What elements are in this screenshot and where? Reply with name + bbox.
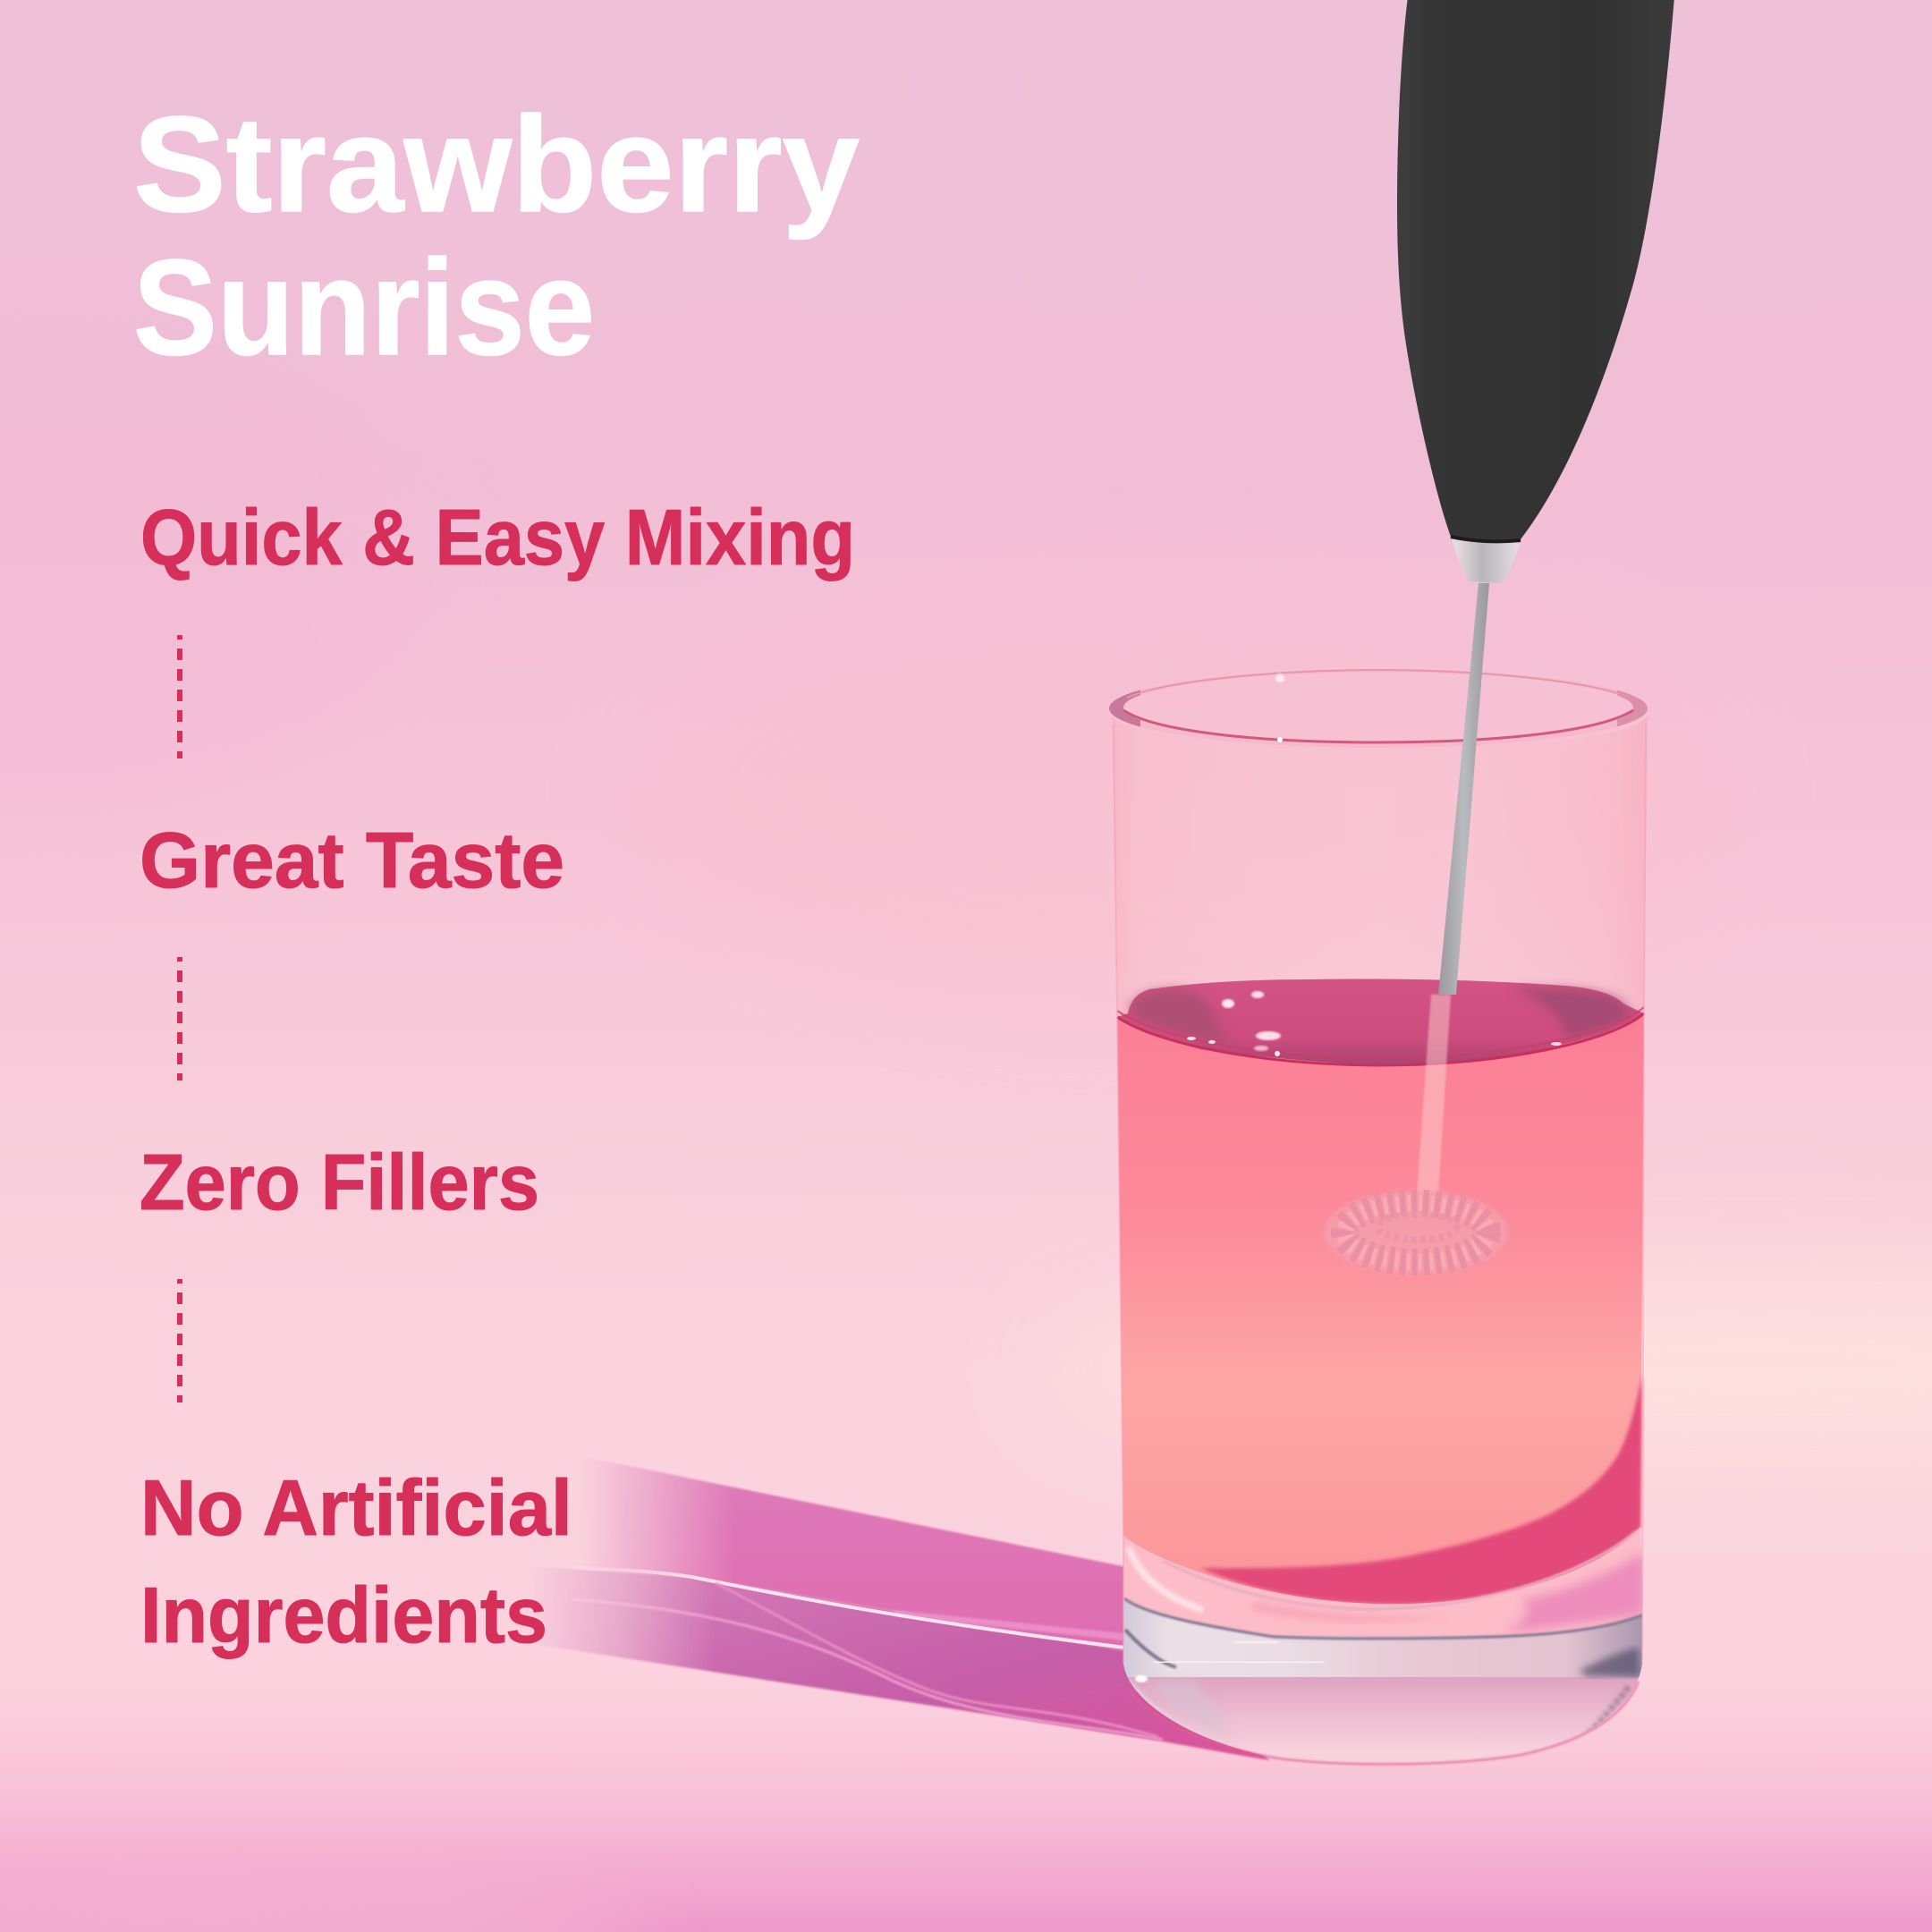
glass base [1118,1527,1646,1771]
liquid crescent [1200,1373,1642,1604]
glass shadow [513,1451,1270,1760]
submerged whisk coil [1324,1191,1508,1275]
pink band under liquid [1118,1527,1644,1646]
benefit: no artificial ingredients: No Artificial [140,1463,572,1552]
base highlights and dark streaks [1124,1598,1644,1639]
dotted connector 1 [177,635,182,758]
shadow upper band [594,1461,1123,1651]
lens bottom [1128,1677,1639,1762]
title: Sunrise [133,232,595,384]
frother handle [1397,0,1674,541]
benefit list [140,493,855,1659]
submerged whisk shaft [1417,995,1451,1194]
title: Strawberry [133,89,860,241]
frother shaft [1438,583,1489,995]
silver band [1118,1598,1644,1678]
benefit: no artificial ingredients: Ingredients [140,1571,547,1659]
glass side edges [1114,724,1646,1664]
benefit: great taste: Great Taste [140,816,564,904]
frother collar [1452,538,1520,583]
benefit: quick and easy mixing: Quick & Easy Mixing [140,493,855,581]
dotted connector 2 [177,957,182,1080]
liquid surface [1117,979,1644,1065]
liquid body [1117,1013,1644,1604]
dotted connector 3 [177,1279,182,1402]
milk frother [1397,0,1674,995]
benefit: no artificial ingredients [140,1463,572,1659]
glass bottom outline [1129,1682,1639,1764]
shadow lower band [513,1565,1270,1760]
glass upper wall [1112,716,1648,1017]
glass rim [1109,669,1648,748]
title [133,89,860,384]
benefit: zero fillers: Zero Fillers [140,1138,539,1226]
drinking glass with pink liquid [1109,669,1648,1771]
